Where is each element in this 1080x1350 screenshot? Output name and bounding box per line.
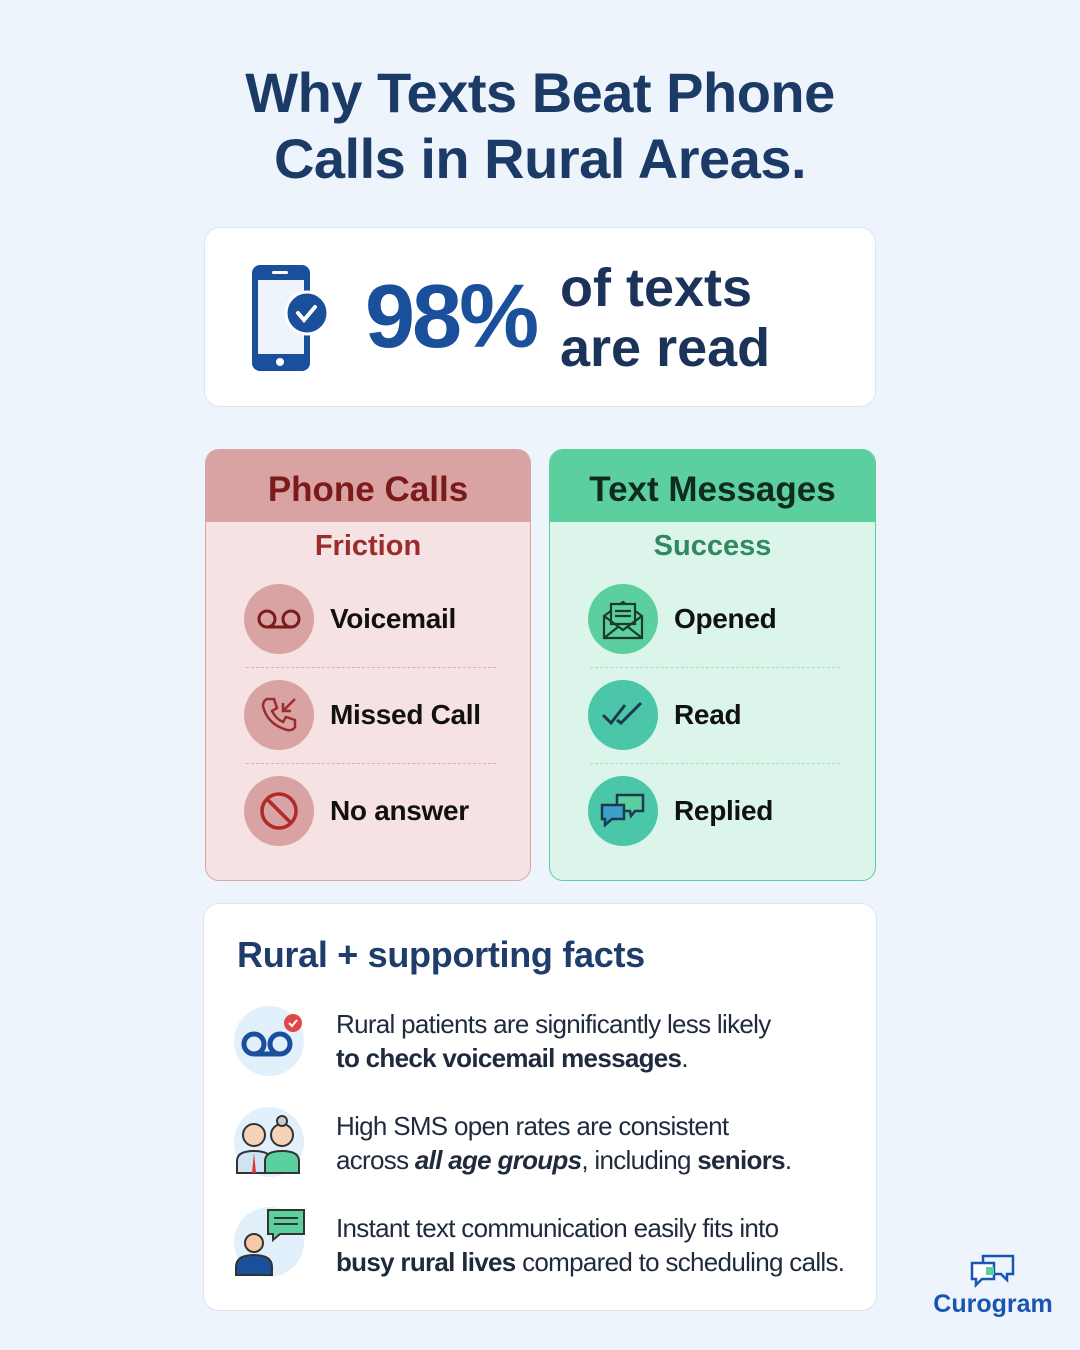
row: missed call (244, 680, 481, 750)
row: missed call: Missed Call (330, 699, 481, 730)
panel: phone calls (205, 449, 531, 881)
stat caption: of texts (560, 258, 752, 318)
icon: seniors (234, 1107, 304, 1177)
stat card (204, 227, 876, 407)
icon: phone with check (252, 265, 326, 371)
fact 1: Rural patients are significantly less likely (336, 1009, 771, 1039)
heading (206, 450, 530, 522)
row: read: Read (674, 699, 741, 730)
subheading: Friction (315, 530, 421, 562)
row: voicemail: Voicemail (330, 603, 456, 634)
heading (550, 450, 875, 522)
row: voicemail (244, 584, 456, 654)
title: Calls in Rural Areas. (274, 127, 806, 190)
row: opened: Opened (674, 603, 776, 634)
fact 2: High SMS open rates are consistent (336, 1111, 728, 1141)
fact 1 (336, 1009, 772, 1073)
row: no answer: No answer (330, 795, 469, 826)
row: no answer (244, 776, 469, 846)
row: opened (588, 584, 776, 654)
logo: Curogram (933, 1254, 1053, 1318)
stat caption: are read (560, 318, 770, 378)
panel: supporting facts (203, 903, 877, 1311)
panel: text messages (549, 449, 876, 881)
fact 3 (336, 1213, 844, 1277)
fact 1: to check voicemail messages. (336, 1043, 688, 1073)
stat number: 98% (365, 267, 536, 367)
stat caption (560, 258, 770, 378)
heading: Text Messages (589, 470, 836, 509)
title: Why Texts Beat Phone (245, 61, 835, 124)
title (245, 61, 835, 190)
logo: Curogram: Curogram (933, 1290, 1053, 1318)
heading: Rural + supporting facts (237, 934, 645, 975)
fact 3: busy rural lives compared to scheduling calls. (336, 1247, 844, 1277)
icon: person with chat (234, 1207, 304, 1277)
fact 2 (336, 1111, 791, 1175)
row: replied: Replied (674, 795, 773, 826)
row: read (588, 680, 741, 750)
fact 2: across all age groups, including seniors. (336, 1145, 791, 1175)
heading: Phone Calls (268, 470, 468, 509)
icon: voicemail (234, 1006, 304, 1076)
icon: chat bubbles (970, 1254, 1014, 1288)
subheading: Success (654, 530, 771, 562)
fact 3: Instant text communication easily fits into (336, 1213, 778, 1243)
row: replied (588, 776, 773, 846)
